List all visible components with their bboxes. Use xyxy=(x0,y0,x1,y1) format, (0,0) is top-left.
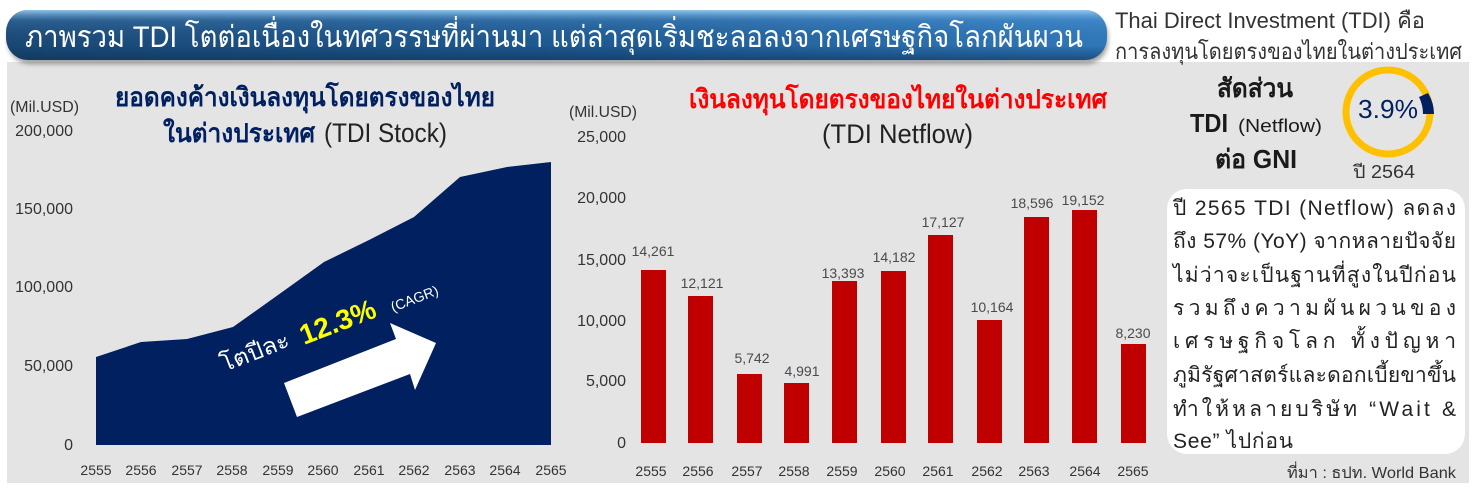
definition text: Thai Direct Investment (TDI) คือ xyxy=(1115,8,1425,33)
text box: explanation: See” ไปก่อน xyxy=(1173,429,1293,453)
x axis labels: 2564 xyxy=(489,462,521,478)
x axis labels: 2556 xyxy=(682,463,714,479)
heading: TDI share of GNI: TDI xyxy=(1190,108,1228,138)
data labels: 14,261 xyxy=(632,243,675,259)
data labels: 5,742 xyxy=(734,350,770,366)
text box: explanation: ไม่ว่าจะเป็นฐานที่สูงในปีก่อน xyxy=(1171,260,1456,288)
bar chart: TDI netflow xyxy=(569,104,1151,479)
y axis labels: 20,000 xyxy=(577,190,626,207)
y axis labels: 50,000 xyxy=(24,358,73,375)
heading: TDI netflow: (TDI Netflow) xyxy=(822,119,973,149)
callout: CAGR: 12.3% xyxy=(295,293,380,351)
heading: TDI stock: ยอดคงค้างเงินลงทุนโดยตรงของไทย xyxy=(115,81,495,114)
heading: TDI share of GNI: สัดส่วน xyxy=(1217,73,1293,103)
x axis labels: 2555 xyxy=(80,462,112,478)
x axis labels: 2560 xyxy=(874,463,906,479)
x axis labels xyxy=(635,463,1149,479)
heading: TDI share of GNI: (Netflow) xyxy=(1238,116,1322,136)
data labels: 13,393 xyxy=(822,265,865,281)
donut slice xyxy=(1419,93,1434,114)
data labels: 12,121 xyxy=(681,275,724,291)
x axis labels xyxy=(80,462,567,478)
x axis labels: 2560 xyxy=(307,462,339,478)
callout: CAGR: โตปีละ xyxy=(216,327,293,377)
heading: TDI stock: (TDI Stock) xyxy=(324,118,447,148)
data labels: 4,991 xyxy=(784,363,820,379)
x axis labels: 2562 xyxy=(398,462,430,478)
x axis labels: 2561 xyxy=(922,463,954,479)
y axis labels xyxy=(577,129,626,452)
callout: CAGR xyxy=(216,282,441,377)
data labels xyxy=(632,192,1151,379)
axis unit: (Mil.USD) xyxy=(10,99,79,116)
title banner xyxy=(6,10,1108,64)
text box: explanation: ภูมิรัฐศาสตร์และดอกเบี้ยขาขึ้น xyxy=(1173,360,1456,388)
x axis labels: 2561 xyxy=(353,462,385,478)
x axis labels: 2556 xyxy=(125,462,157,478)
icon: white arrow xyxy=(284,323,436,417)
y axis labels: 100,000 xyxy=(15,279,73,296)
text box: explanation: รวมถึงความผันผวนของ xyxy=(1173,297,1456,320)
area xyxy=(96,162,551,445)
text box: explanation: ปี 2565 TDI (Netflow) ลดลง xyxy=(1172,197,1456,220)
heading: TDI share of GNI: ต่อ GNI xyxy=(1215,144,1297,174)
text box: explanation: เศรษฐกิจโลก ทั้งปัญหา xyxy=(1173,326,1456,353)
x axis labels: 2559 xyxy=(262,462,294,478)
source note: ที่มา : ธปท. World Bank xyxy=(1287,461,1457,482)
heading: TDI netflow xyxy=(689,83,1107,149)
data labels: 19,152 xyxy=(1062,192,1105,208)
text box: explanation: ถึง 57% (YoY) จากหลายปัจจัย xyxy=(1173,230,1456,253)
heading: TDI share of GNI xyxy=(1190,73,1322,174)
title banner: ภาพรวม TDI โตต่อเนื่องในทศวรรษที่ผ่านมา แต่ล่าสุดเริ่มชะลอลงจากเศรษฐกิจโลกผันผวน xyxy=(25,16,1083,56)
donut chart: 3.9% xyxy=(1346,70,1434,182)
axis unit: (Mil.USD) xyxy=(569,104,637,121)
x axis labels: 2555 xyxy=(635,463,667,479)
text box: explanation: ทำให้หลายบริษัท “Wait & xyxy=(1173,397,1456,421)
y axis labels: 10,000 xyxy=(577,313,626,330)
y axis labels: 25,000 xyxy=(577,129,626,146)
x axis labels: 2564 xyxy=(1069,463,1101,479)
y axis labels: 0 xyxy=(64,437,73,454)
heading: TDI stock xyxy=(115,81,495,148)
x axis labels: 2563 xyxy=(444,462,476,478)
x axis labels: 2563 xyxy=(1018,463,1050,479)
x axis labels: 2557 xyxy=(731,463,763,479)
x axis labels: 2558 xyxy=(216,462,248,478)
x axis labels: 2558 xyxy=(778,463,810,479)
heading: TDI netflow: เงินลงทุนโดยตรงของไทยในต่างประเทศ xyxy=(689,83,1107,116)
heading: TDI stock: ในต่างประเทศ xyxy=(163,118,315,148)
data labels: 10,164 xyxy=(971,299,1014,315)
y axis labels: 0 xyxy=(617,435,626,452)
x axis labels: 2559 xyxy=(826,463,858,479)
y axis labels: 5,000 xyxy=(586,373,626,390)
donut value: 3.9% xyxy=(1358,94,1418,124)
y axis labels: 200,000 xyxy=(15,123,73,140)
bars xyxy=(641,210,1146,443)
donut year: ปี 2564 xyxy=(1353,162,1415,182)
data labels: 14,182 xyxy=(873,249,916,265)
data labels: 18,596 xyxy=(1011,195,1054,211)
x axis labels: 2557 xyxy=(171,462,203,478)
y axis labels: 15,000 xyxy=(577,252,626,269)
y axis labels: 150,000 xyxy=(15,201,73,218)
data labels: 17,127 xyxy=(922,214,965,230)
x axis labels: 2565 xyxy=(535,462,567,478)
y axis labels xyxy=(15,123,73,454)
area chart: TDI stock xyxy=(10,99,567,478)
definition text xyxy=(1115,8,1462,65)
text box: explanation xyxy=(1167,189,1465,454)
data labels: 8,230 xyxy=(1115,325,1151,341)
x axis labels: 2562 xyxy=(971,463,1003,479)
x axis labels: 2565 xyxy=(1117,463,1149,479)
callout: CAGR: (CAGR) xyxy=(388,282,441,315)
